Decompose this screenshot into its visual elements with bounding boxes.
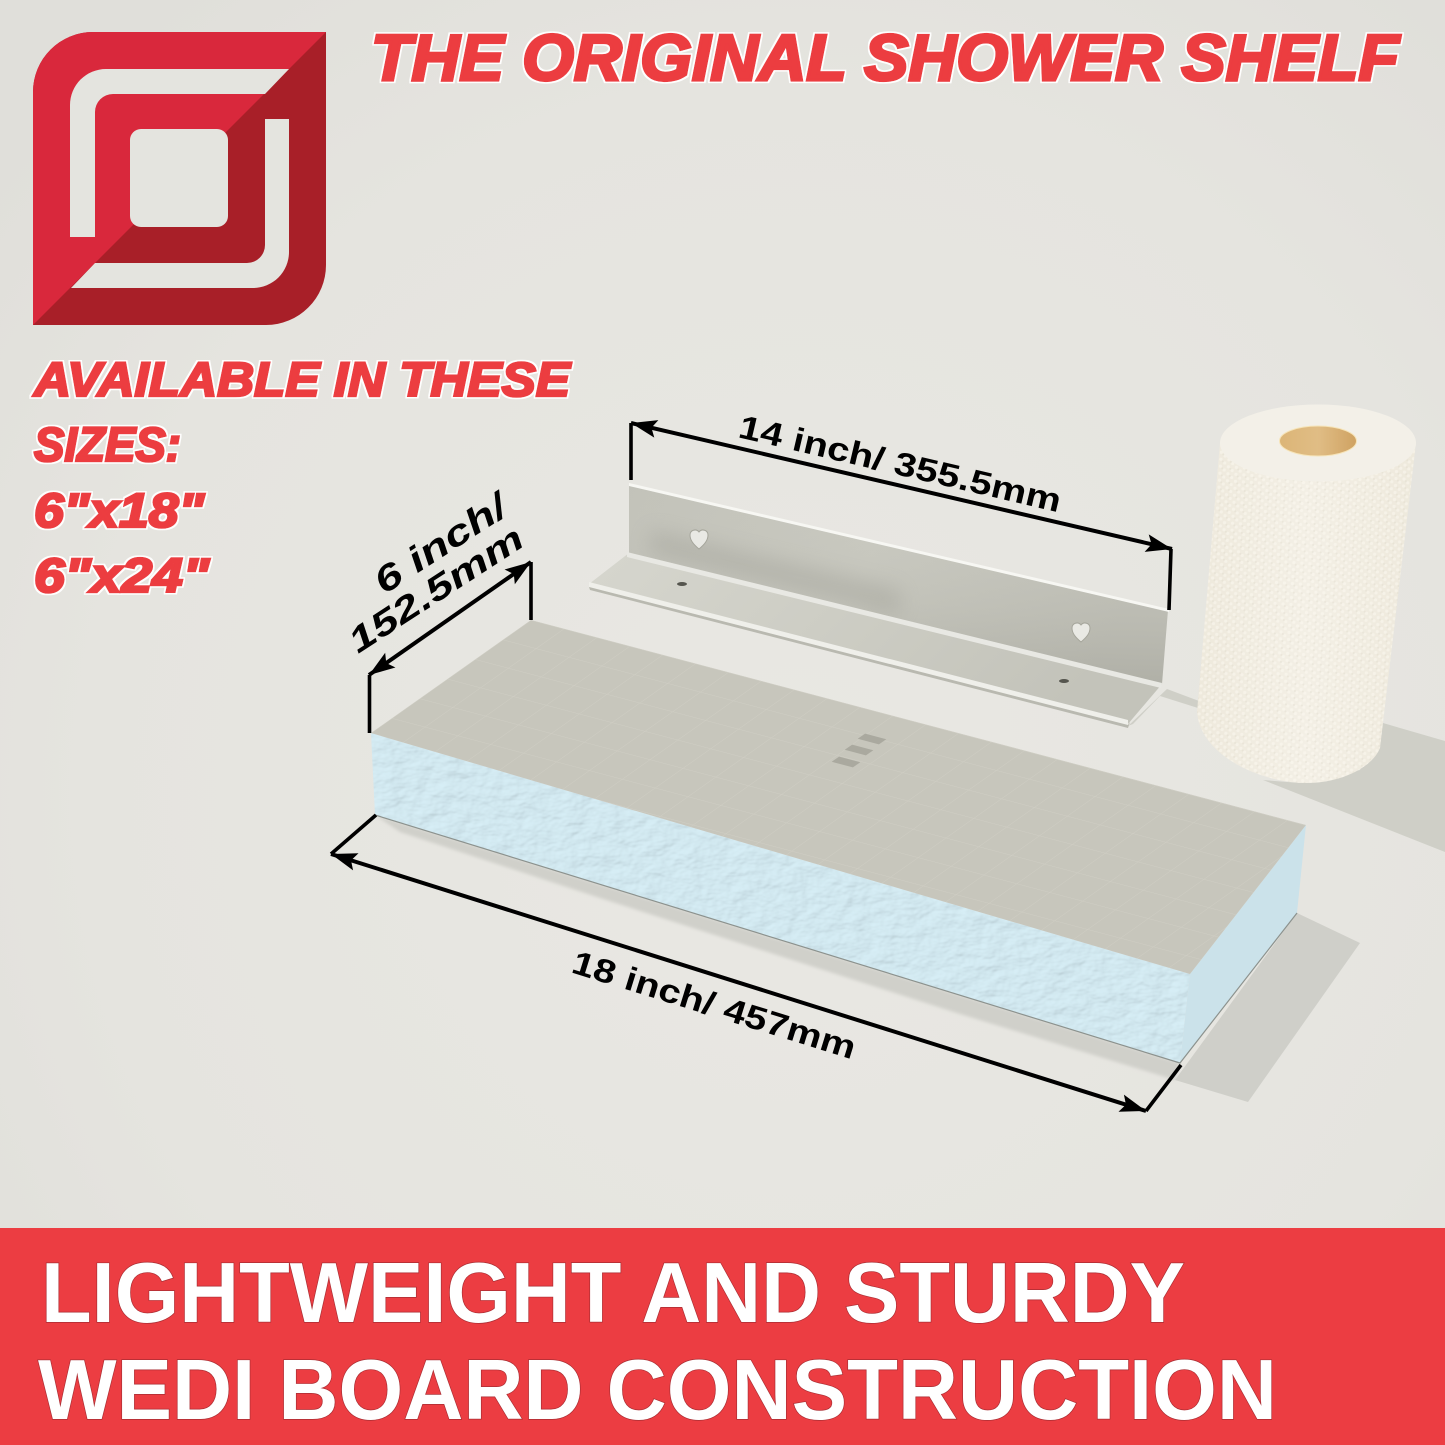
wedi board (371, 620, 1306, 1063)
bracket screw hole left (677, 582, 687, 586)
shadow: bracket (1128, 689, 1199, 726)
logo (33, 32, 326, 325)
bracket foot (589, 553, 1162, 724)
shadow: board (375, 815, 1360, 1102)
dimension: 18 inch (331, 815, 1181, 1111)
board centre marks (832, 734, 886, 767)
roll core (1280, 426, 1356, 456)
banner headline: WEDI BOARD CONSTRUCTION (38, 1343, 1277, 1438)
bracket top edge highlight (629, 483, 1169, 612)
bracket back plate (629, 484, 1168, 684)
bracket front edge (589, 582, 1128, 725)
sizes text block: 6"x24" (34, 550, 210, 603)
sizes text block: SIZES: (34, 419, 181, 472)
bottom banner (0, 1228, 1445, 1445)
sizes text block: AVAILABLE IN THESE (33, 354, 572, 407)
sizes text block (33, 354, 572, 603)
roll body (1197, 443, 1416, 783)
sizes text block: 6"x18" (34, 485, 205, 538)
paper roll (1197, 404, 1416, 783)
board bottom edges (375, 815, 1297, 1063)
bracket fold highlight (627, 552, 1162, 688)
bracket (589, 483, 1169, 728)
dimension: 6 inch: 6 inch/ (366, 483, 519, 602)
dimension: 6 inch (341, 483, 531, 733)
shadow: paper roll (1263, 723, 1445, 852)
roll top (1220, 404, 1416, 482)
banner headline (38, 1246, 1277, 1438)
dimension: 14 inch (631, 408, 1172, 610)
bracket keyhole left (690, 530, 708, 549)
board foam front face (371, 733, 1190, 1063)
dimension: 18 inch: 18 inch/ 457mm (568, 943, 861, 1066)
dimension: 6 inch: 152.5mm (341, 519, 531, 661)
bracket keyhole right (1072, 623, 1090, 642)
title: THE ORIGINAL SHOWER SHELF (371, 21, 1401, 94)
dimension: 14 inch: 14 inch/ 355.5mm (735, 408, 1065, 519)
board side face (1180, 825, 1306, 1063)
banner headline: LIGHTWEIGHT AND STURDY (41, 1246, 1185, 1341)
board top surface (371, 620, 1306, 974)
bracket screw hole right (1059, 679, 1069, 683)
